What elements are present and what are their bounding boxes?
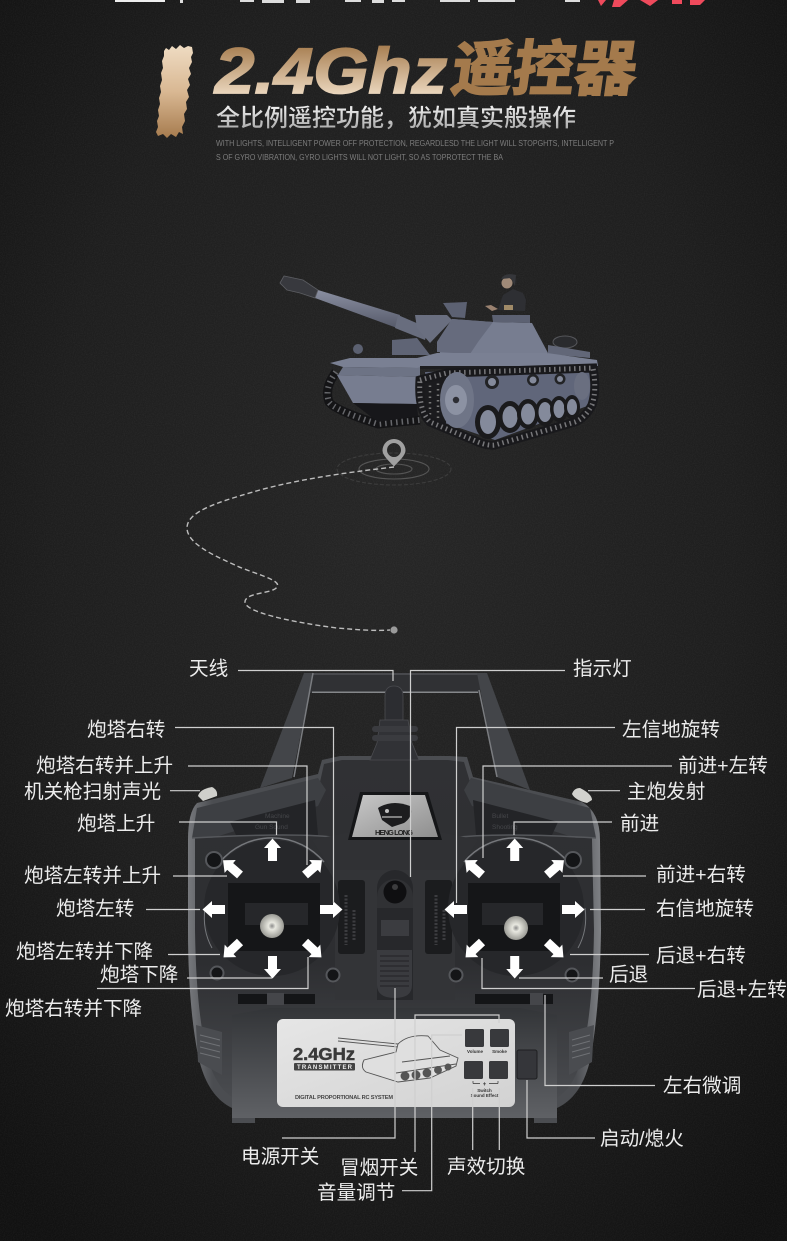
label: 冒烟开关 <box>340 1015 499 1179</box>
gun housing and hatch <box>392 302 467 355</box>
plate button captions <box>467 1049 507 1098</box>
direction arrows: right stick <box>444 838 584 978</box>
label: 机关枪扫射声光: 机关枪扫射声光 <box>24 781 161 803</box>
label: 炮塔右转并上升: 炮塔右转并上升 <box>36 755 173 777</box>
label: 炮塔上升 <box>77 813 276 835</box>
plate logo text: 2.4GHz <box>293 1044 355 1064</box>
right stick <box>448 838 586 976</box>
shoulder buttons <box>198 787 592 803</box>
title: 2.4Ghz <box>214 35 447 107</box>
barrel <box>280 276 428 340</box>
dashed route <box>187 467 394 630</box>
label: 主炮发射: 主炮发射 <box>627 781 705 803</box>
label: 后退+右转: 后退+右转 <box>656 945 746 967</box>
label: 电源开关: 电源开关 <box>241 1146 319 1168</box>
horizontal trims <box>238 993 553 1005</box>
english description <box>216 138 614 162</box>
label: 冒烟开关: 冒烟开关 <box>340 1157 418 1179</box>
route end dot <box>390 626 398 634</box>
cropped headline fragments at top edge <box>115 0 705 7</box>
plate button captions: Switch <box>477 1088 492 1093</box>
label: 左信地旋转 <box>456 719 720 903</box>
label: 左右微调 <box>545 995 741 1097</box>
plate tank line art <box>338 1036 458 1082</box>
plate button captions: Volume <box>467 1049 483 1054</box>
title <box>214 35 642 107</box>
right track <box>418 368 595 445</box>
label: 指示灯 <box>410 658 632 877</box>
power slide grille <box>377 950 412 998</box>
front label plate: DIGITAL PROPORTIONAL RC SYSTEM <box>295 1095 393 1101</box>
label: 后退 <box>519 964 648 986</box>
label: 启动/熄火: 启动/熄火 <box>600 1128 684 1150</box>
label: 天线: 天线 <box>189 658 228 680</box>
title: 遥控器 <box>447 35 642 103</box>
shoulder panels <box>192 778 596 838</box>
label: 炮塔右转: 炮塔右转 <box>87 719 165 741</box>
road wheels <box>475 395 580 439</box>
location rings <box>337 453 451 485</box>
plate logo text: TRANSMITTER <box>297 1065 353 1071</box>
remote controller <box>188 673 601 1123</box>
label: 启动/熄火 <box>527 1080 684 1150</box>
label: 音量调节 <box>317 1035 462 1204</box>
shoulder panels: Bullet <box>492 813 508 820</box>
logo plate: HENG LONG <box>375 828 413 837</box>
label: 右信地旋转: 右信地旋转 <box>656 898 754 920</box>
label: 前进+左转 <box>483 755 768 858</box>
far track <box>328 372 420 424</box>
label: 指示灯: 指示灯 <box>573 658 632 680</box>
label: 后退: 后退 <box>609 964 648 986</box>
shoulder panels: Shooting <box>492 824 518 831</box>
label: 左右微调: 左右微调 <box>663 1075 741 1097</box>
superstructure <box>437 315 590 358</box>
direction arrows: left stick <box>202 838 342 978</box>
plate button captions: Smoke <box>492 1049 507 1054</box>
side sliders <box>338 880 452 954</box>
handle <box>260 673 530 790</box>
subtitle: 全比例遥控功能，犹如真实般操作 <box>216 105 576 132</box>
commander figure <box>485 274 526 311</box>
label: 炮塔右转并上升 <box>36 755 307 865</box>
tank illustration <box>280 274 598 445</box>
label: 炮塔右转并下降: 炮塔右转并下降 <box>5 998 142 1020</box>
screws <box>206 852 581 982</box>
return rollers and idler <box>485 372 590 400</box>
label: 炮塔右转并下降 <box>5 957 308 1020</box>
plate buttons <box>464 1029 509 1079</box>
label: 炮塔下降: 炮塔下降 <box>100 964 178 986</box>
body shell <box>188 756 601 1123</box>
english description: S OF GYRO VIBRATION, GYRO LIGHTS WILL NOT LIGHT, SO AS TOPROTECT THE BA <box>216 152 503 162</box>
icon: location pin <box>382 439 406 466</box>
side vents <box>196 1025 594 1075</box>
hull <box>330 344 598 440</box>
label: 天线 <box>189 658 393 681</box>
label: 前进+右转: 前进+右转 <box>656 864 746 886</box>
plate button captions: + <box>483 1082 487 1088</box>
antenna <box>370 686 419 760</box>
lower grey band <box>232 1008 557 1118</box>
label: 炮塔上升: 炮塔上升 <box>77 813 155 835</box>
power indicator lens <box>377 879 413 936</box>
label: 电源开关 <box>241 988 395 1168</box>
plate button captions: Sound Effect <box>471 1093 499 1098</box>
side start button <box>517 1050 537 1079</box>
center column <box>312 833 478 1000</box>
label: 声效切换: 声效切换 <box>447 1156 525 1178</box>
label: 炮塔左转: 炮塔左转 <box>56 898 134 920</box>
label: 左信地旋转: 左信地旋转 <box>622 719 720 741</box>
label: 前进 <box>514 813 659 835</box>
label: 炮塔右转 <box>87 719 334 903</box>
label: 后退+左转 <box>482 958 787 1001</box>
label: 前进+左转: 前进+左转 <box>678 755 768 777</box>
label: 炮塔左转并下降: 炮塔左转并下降 <box>16 941 153 963</box>
front label plate <box>277 1019 515 1107</box>
left stick <box>204 838 340 976</box>
label: 后退+左转: 后退+左转 <box>697 979 787 1001</box>
label: 声效切换 <box>447 1088 525 1178</box>
drive sprocket <box>440 372 474 428</box>
english description: WITH LIGHTS, INTELLIGENT POWER OFF PROTECTION, REGARDLESD THE LIGHT WILL STOPGHTS, INTELLIGENT P <box>216 138 614 148</box>
label: 主炮发射 <box>588 781 705 803</box>
shoulder panels: Gun Sound <box>255 824 288 831</box>
label: 音量调节: 音量调节 <box>317 1182 395 1204</box>
label: 前进: 前进 <box>620 813 659 835</box>
label: 炮塔左转并上升: 炮塔左转并上升 <box>24 865 161 887</box>
shoulder panels: Machine <box>265 813 290 820</box>
icon: gold brush bar <box>156 45 193 138</box>
logo plate <box>348 792 442 840</box>
